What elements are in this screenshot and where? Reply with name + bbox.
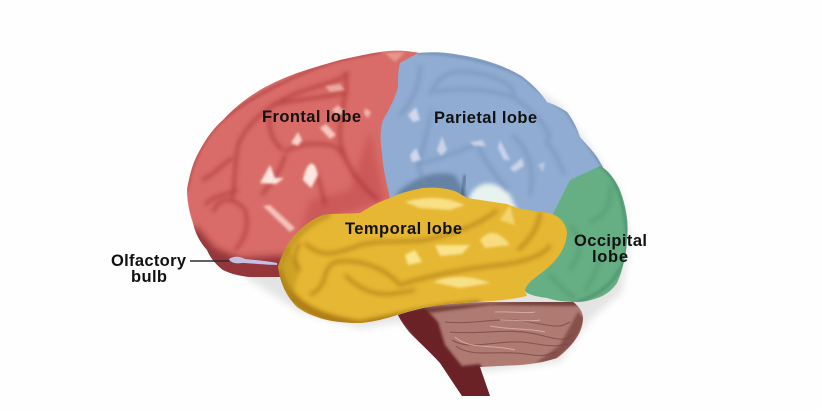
brain diagram: [112, 50, 646, 396]
drop shadow: [205, 58, 630, 372]
brainstem and cerebellum: [398, 302, 583, 396]
parietal lobe: [381, 52, 603, 230]
label: occipital lobe: Occipital: [574, 232, 647, 250]
label: olfactory bulb: Olfactory: [111, 252, 187, 270]
olfactory bulb: [190, 257, 277, 265]
label: parietal lobe: Parietal lobe: [434, 109, 537, 127]
label: occipital lobe: lobe: [592, 248, 628, 266]
label: temporal lobe: Temporal lobe: [345, 220, 462, 238]
label: olfactory bulb: bulb: [131, 268, 167, 286]
frontal lobe: [187, 51, 430, 285]
label: frontal lobe: Frontal lobe: [262, 108, 361, 126]
label: olfactory bulb: [111, 252, 187, 286]
occipital lobe: [515, 166, 628, 302]
label: occipital lobe: [574, 232, 647, 266]
temporal lobe: [275, 188, 567, 325]
